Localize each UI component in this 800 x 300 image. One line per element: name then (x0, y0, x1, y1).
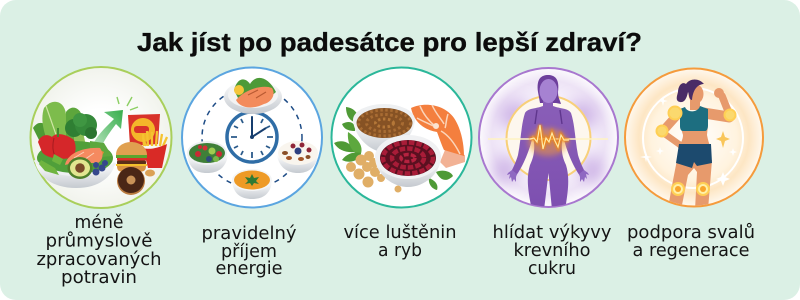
icon: athletic woman (662, 80, 730, 210)
label: průmyslově (46, 232, 152, 252)
icon: nuggets (145, 170, 155, 176)
purple glow (493, 101, 604, 184)
label: a regenerace (632, 241, 750, 261)
icon: sparkles (640, 96, 737, 186)
circle: purple ring (479, 68, 618, 207)
circle: teal ring (332, 68, 472, 208)
icon: donut (117, 167, 145, 195)
circle: orange ring (625, 68, 763, 206)
circle: green ring (30, 67, 172, 208)
panel: muscle support and regeneration (625, 68, 763, 261)
label (36, 213, 162, 288)
icon: spark lines (117, 97, 138, 110)
icon: burger (116, 142, 147, 172)
icon: green arrow (92, 110, 123, 150)
icon: lettuce leaves (33, 102, 82, 152)
label: pravidelný (202, 224, 296, 244)
dashed orbit (202, 88, 302, 188)
energy orbit (643, 88, 743, 188)
label (492, 223, 612, 279)
label: potravin (61, 268, 137, 288)
icon: salad bowl (187, 141, 228, 173)
label: a ryb (378, 241, 422, 261)
label: méně (74, 213, 124, 233)
icon: chickpeas (346, 151, 402, 192)
icon: green leaves (334, 107, 453, 190)
label: zpracovaných (36, 250, 162, 270)
title: Jak jíst po padesátce pro lepší zdraví? (137, 27, 642, 57)
label (344, 223, 456, 261)
icon: glowing joints (656, 106, 736, 195)
icon: fries (143, 131, 167, 168)
label: příjem (221, 242, 277, 262)
icon: clock (227, 112, 277, 162)
icon: salmon steak (411, 105, 465, 168)
yellow glow ring (506, 96, 590, 180)
label: hlídat výkyvy (492, 223, 612, 243)
panel: watch blood sugar swings (479, 68, 618, 279)
panel: regular energy intake (182, 68, 322, 279)
icon: salad bowl (35, 128, 115, 188)
label: cukru (528, 259, 576, 279)
orange body glow (528, 128, 568, 156)
label: více luštěnin (344, 223, 456, 243)
label (627, 223, 755, 261)
panel: less processed food (30, 67, 172, 288)
label: podpora svalů (627, 223, 755, 243)
icon: woman silhouette (507, 75, 589, 210)
icon: broccoli (65, 113, 97, 146)
icon: oatmeal bowl (277, 141, 318, 173)
label: energie (216, 259, 282, 279)
icon: salmon plate (224, 78, 282, 114)
icon: chips bag (128, 114, 160, 146)
icon: kidney bean bowl (375, 135, 441, 187)
panel: more legumes and fish (332, 68, 472, 261)
label: krevního (514, 241, 590, 261)
circle: blue ring (182, 68, 322, 208)
icon: glowing pulse line (488, 125, 608, 149)
icon: lentil bowl (353, 104, 415, 152)
icon: soup bowl (232, 169, 272, 199)
label (202, 224, 296, 279)
